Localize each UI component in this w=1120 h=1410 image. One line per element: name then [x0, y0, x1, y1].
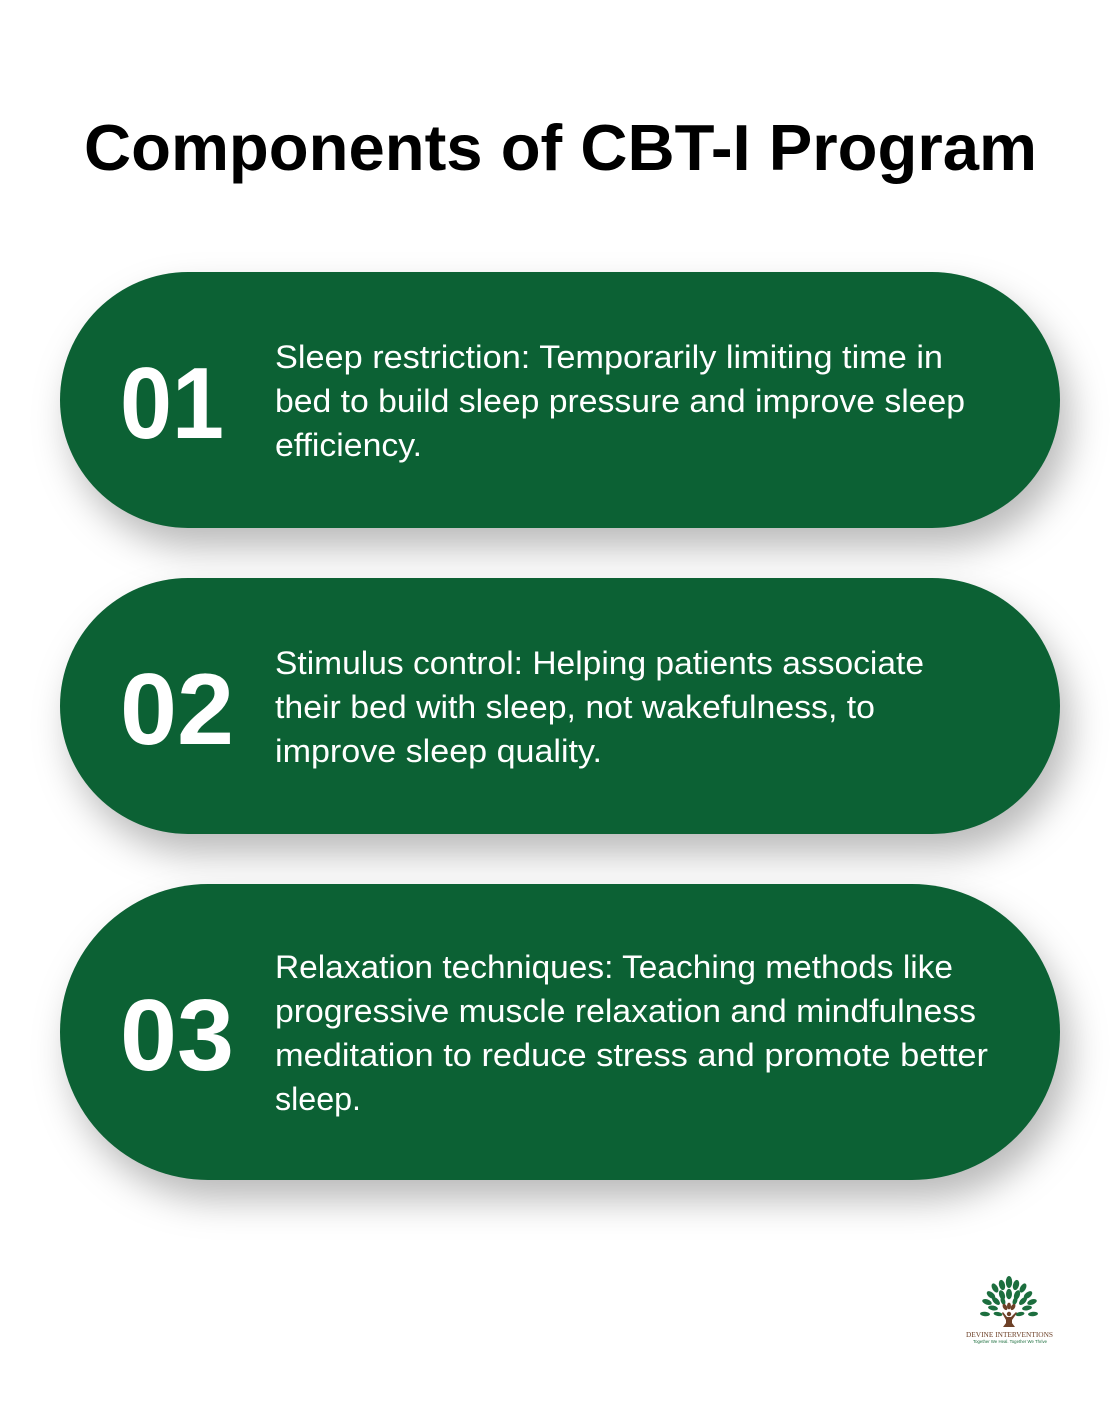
text: sleep restriction: efficiency. — [275, 427, 422, 463]
text: relaxation techniques: meditation to reduce stress and promote better — [275, 1037, 988, 1073]
icon: tree trunk figure — [1002, 1303, 1017, 1327]
panel: step 01 — [60, 272, 1060, 528]
text: stimulus control: their bed with sleep, not wakefulness, to — [275, 689, 875, 725]
logo: Devine Interventions — [966, 1276, 1053, 1345]
text: sleep restriction: bed to build sleep pressure and improve sleep — [275, 383, 965, 419]
text: sleep restriction — [275, 339, 965, 463]
number 01: 01 — [120, 348, 224, 460]
text: relaxation techniques: Relaxation techniques: Teaching methods like — [275, 949, 953, 985]
card background 02 — [60, 578, 1060, 834]
number 02: 02 — [120, 654, 234, 766]
text: relaxation techniques — [275, 949, 988, 1117]
card background 01 — [60, 272, 1060, 528]
panel: step 02 — [60, 578, 1060, 834]
title: Components of CBT-I Program — [84, 112, 1037, 184]
text: stimulus control: improve sleep quality. — [275, 733, 602, 769]
text: relaxation techniques: progressive muscle relaxation and mindfulness — [275, 993, 976, 1029]
text: relaxation techniques: sleep. — [275, 1081, 361, 1117]
card background 03 — [60, 884, 1060, 1180]
text: stimulus control: Stimulus control: Helping patients associate — [275, 645, 924, 681]
tagline: Together We Heal. Together We Thrive — [973, 1339, 1047, 1345]
icon: tree leaves — [980, 1276, 1038, 1317]
panel: step 03 — [60, 884, 1060, 1180]
text: sleep restriction: Sleep restriction: Temporarily limiting time in — [275, 339, 943, 375]
number 03: 03 — [120, 980, 234, 1092]
brand name: DEVINE INTERVENTIONS — [966, 1331, 1053, 1339]
text: stimulus control — [275, 645, 924, 769]
